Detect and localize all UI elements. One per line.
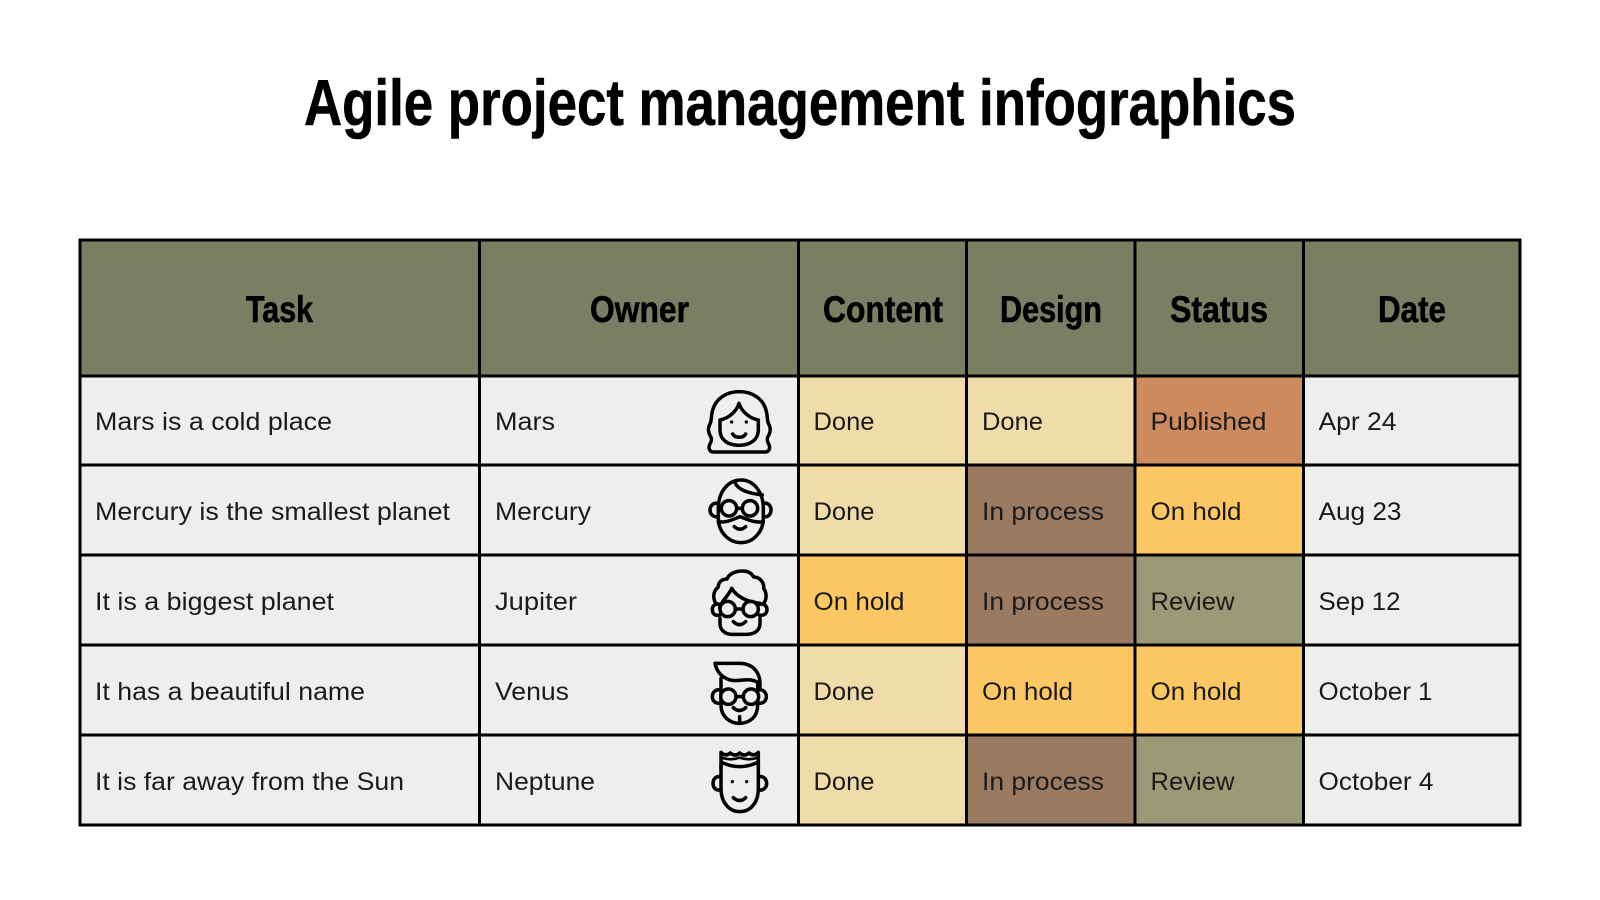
header row: Content	[823, 289, 943, 330]
header row: Owner	[590, 289, 689, 330]
row: Jupiter: Sep 12	[1318, 588, 1400, 616]
row: Mars: Apr 24	[1318, 408, 1397, 436]
row: Jupiter: On hold	[814, 588, 904, 616]
row: Mars	[80, 376, 1520, 465]
row: Venus	[80, 645, 1520, 735]
row: Mercury: Mercury	[495, 498, 592, 526]
row: Mercury: Mercury is the smallest planet	[95, 498, 450, 526]
row: Mercury	[80, 465, 1520, 555]
row: Venus: On hold	[982, 678, 1073, 706]
row: Neptune: In process	[982, 768, 1104, 796]
row: Mars: Mars is a cold place	[95, 408, 332, 436]
row: Venus: Venus	[495, 678, 569, 706]
icon: bearded man with glasses	[710, 480, 771, 543]
row: Neptune: Neptune	[495, 768, 595, 796]
row: Jupiter: It is a biggest planet	[95, 588, 334, 616]
icon: man with quiff and glasses	[712, 663, 766, 723]
row: Neptune: October 4	[1318, 768, 1434, 796]
icon: man with spiky hair	[713, 752, 767, 812]
row: Neptune	[80, 735, 1520, 825]
row: Jupiter: Review	[1150, 588, 1235, 616]
header row: Status	[1170, 289, 1268, 330]
title: Agile project management infographics	[304, 66, 1296, 139]
row: Venus: On hold	[1150, 678, 1242, 706]
row: Neptune: Review	[1150, 768, 1235, 796]
row: Jupiter: In process	[982, 588, 1104, 616]
header row	[80, 240, 1520, 376]
icon: curly-haired person with glasses	[712, 571, 767, 634]
row: Neptune: Done	[814, 768, 874, 796]
table	[78, 238, 1522, 826]
icon: woman with wavy hair	[708, 392, 770, 452]
row: Neptune: It is far away from the Sun	[95, 768, 404, 796]
header row: Task	[246, 289, 313, 330]
row: Jupiter	[80, 555, 1520, 645]
row: Mercury: In process	[982, 498, 1104, 526]
row: Venus: Done	[814, 678, 874, 706]
row: Mercury: Done	[814, 498, 874, 526]
row: Venus: It has a beautiful name	[95, 678, 365, 706]
row: Venus: October 1	[1318, 678, 1432, 706]
row: Mars: Mars	[495, 408, 555, 436]
row: Mercury: On hold	[1150, 498, 1242, 526]
header row: Design	[1000, 289, 1102, 330]
header row: Date	[1378, 289, 1446, 330]
row: Mars: Done	[814, 408, 874, 436]
row: Jupiter: Jupiter	[495, 588, 577, 616]
row: Mars: Done	[982, 408, 1043, 436]
row: Mercury: Aug 23	[1318, 498, 1402, 526]
row: Mars: Published	[1150, 408, 1266, 436]
